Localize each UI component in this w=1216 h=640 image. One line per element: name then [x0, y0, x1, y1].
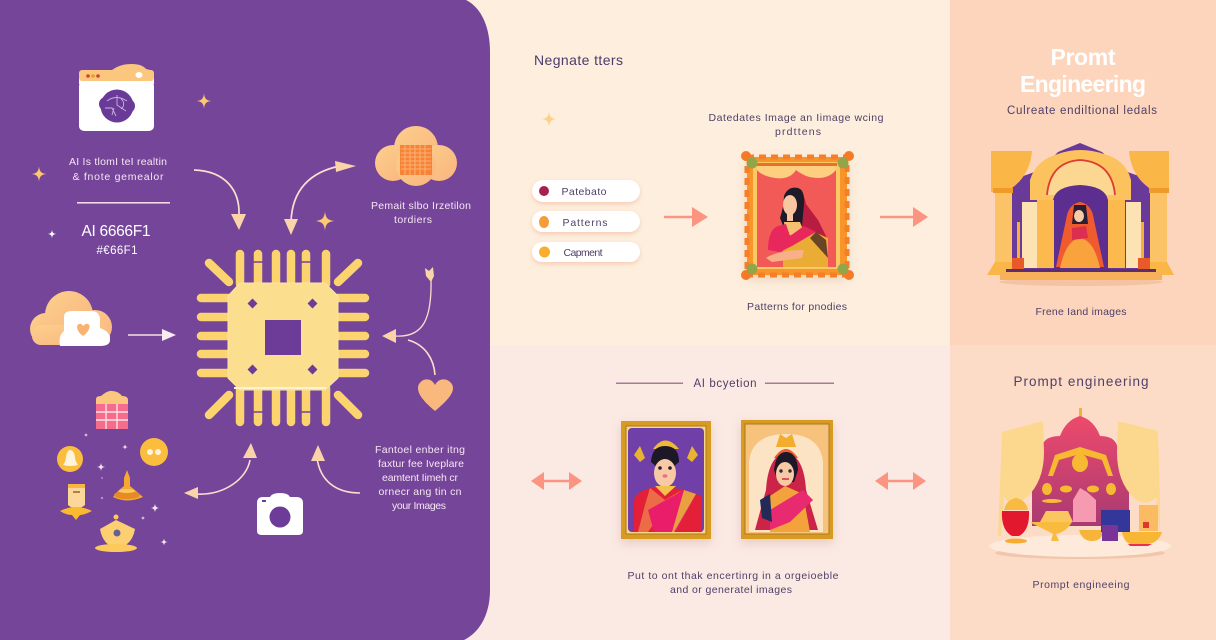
text: AI intro	[69, 156, 167, 183]
text: colour code	[82, 223, 150, 257]
text: description: prdttens	[775, 126, 821, 138]
arrow: chip to cloud	[284, 161, 356, 235]
corner flowers	[741, 151, 751, 161]
plinth	[1000, 272, 1162, 280]
picture: temple	[987, 143, 1174, 286]
title: Promt	[1050, 44, 1116, 70]
text: description	[708, 112, 884, 138]
text: temple caption: Frene Iand images	[1036, 306, 1126, 318]
text: feature caption: Fantoel enber itng	[375, 444, 465, 456]
small offering bowl	[1079, 530, 1104, 541]
red vase	[1002, 498, 1029, 544]
pill: Patterns: Patterns	[562, 217, 608, 229]
jar and tray	[1122, 505, 1162, 546]
icon: calendar	[96, 391, 128, 429]
side columns	[987, 151, 1174, 275]
divider rule	[77, 202, 170, 204]
text: cloud caption: tordiers	[394, 214, 432, 226]
heading: Negnate tters	[534, 52, 623, 68]
seated figure	[1056, 202, 1104, 268]
picture: peach portrait	[741, 420, 833, 539]
text: feature caption: faxtur fee Iveplare	[378, 458, 464, 470]
panel: AI bcyetion	[531, 378, 926, 596]
golden bowl	[1031, 499, 1073, 541]
arrow: chip to icons	[184, 443, 257, 499]
text: AI intro: AI Is tlomI teI realtin	[69, 156, 167, 168]
icon: eyes badge	[140, 438, 168, 466]
picture: framed portrait	[741, 151, 854, 280]
shrine	[1073, 488, 1096, 522]
text: altar caption: Prompt engineeing	[1032, 579, 1130, 591]
heading: Prompt engineering	[1014, 374, 1148, 389]
heading with rules: AI bcyetion	[694, 378, 756, 390]
icon: cloud with grid	[375, 126, 457, 186]
text: AI intro: & fnote gemealor	[72, 171, 164, 183]
picture: purple portrait	[621, 421, 711, 539]
text: feature caption: your Images	[392, 500, 446, 512]
panel: negative patterns	[532, 52, 928, 313]
pill: Patebato: Patebato	[562, 186, 607, 198]
chip core	[265, 320, 301, 355]
arrow: heart to chip	[382, 267, 435, 375]
text: description: Datedates Image an Iimage wcing	[708, 112, 884, 124]
text: frames caption: Put to ont thak encertinrg in a orgeioeble	[628, 570, 839, 582]
text: frames caption: and or generatel images	[670, 584, 792, 596]
icon: browser window with brain	[79, 64, 154, 131]
title	[1020, 44, 1146, 97]
blue box	[1101, 510, 1130, 532]
icon: goblet	[60, 484, 92, 520]
chip body	[228, 283, 338, 390]
arrow: pills to frame	[664, 207, 708, 227]
text: cloud caption: Pemait slbo Irzetilon	[371, 200, 471, 212]
gold arch	[1030, 150, 1131, 200]
panel: purple AI generator panel	[0, 0, 490, 640]
icon: crown bowl	[95, 514, 137, 552]
text: colour code: #€66F1	[96, 245, 138, 257]
subtitle: Culreate endiltional ledals	[1007, 105, 1157, 117]
text: feature caption: eamtent Iimeh cr	[382, 472, 458, 484]
purple backdrop	[1012, 143, 1150, 272]
ornaments	[1042, 447, 1116, 495]
arrow: frame to temple	[880, 207, 928, 227]
dome	[1032, 408, 1129, 526]
arrow: cloud to chip	[128, 329, 176, 341]
text: colour code: AI 6666F1	[82, 223, 150, 240]
title: Engineering	[1020, 71, 1146, 97]
text: cloud caption	[371, 200, 471, 226]
icon: heart	[418, 379, 453, 411]
icon: small white sparkles	[84, 433, 168, 546]
text: frames caption	[628, 570, 839, 596]
icon: cloud with document and heart	[30, 291, 112, 346]
inner columns	[1022, 200, 1141, 268]
text: frame caption: Patterns for pnodies	[747, 301, 847, 313]
list: pills	[532, 180, 640, 262]
icon: sparkles on purple	[32, 94, 334, 238]
panel: prompt engineering altar	[989, 374, 1171, 591]
arrow: left double	[531, 472, 582, 490]
icon: processor chip	[201, 254, 365, 422]
text: feature caption: ornecr ang tin cn	[378, 486, 462, 498]
arrow: text to chip	[194, 170, 246, 230]
arrow: caption to chip	[311, 445, 360, 493]
curtains	[998, 421, 1160, 536]
curtain valance	[757, 165, 836, 178]
panel: prompt engineering temple	[987, 44, 1174, 318]
icon: person badge	[57, 446, 83, 472]
arrow: right double	[875, 472, 926, 490]
door	[1053, 185, 1108, 270]
icon: oil lamp	[113, 470, 143, 500]
picture: altar scene	[989, 408, 1171, 559]
plate	[995, 547, 1165, 559]
portrait figure	[796, 190, 828, 250]
text: feature caption	[375, 444, 465, 512]
pill: Capment: Capment	[564, 247, 603, 259]
icon: camera	[257, 493, 303, 535]
lamps	[1012, 222, 1150, 272]
icon: sparkle	[542, 112, 556, 126]
chip pins	[201, 254, 365, 422]
